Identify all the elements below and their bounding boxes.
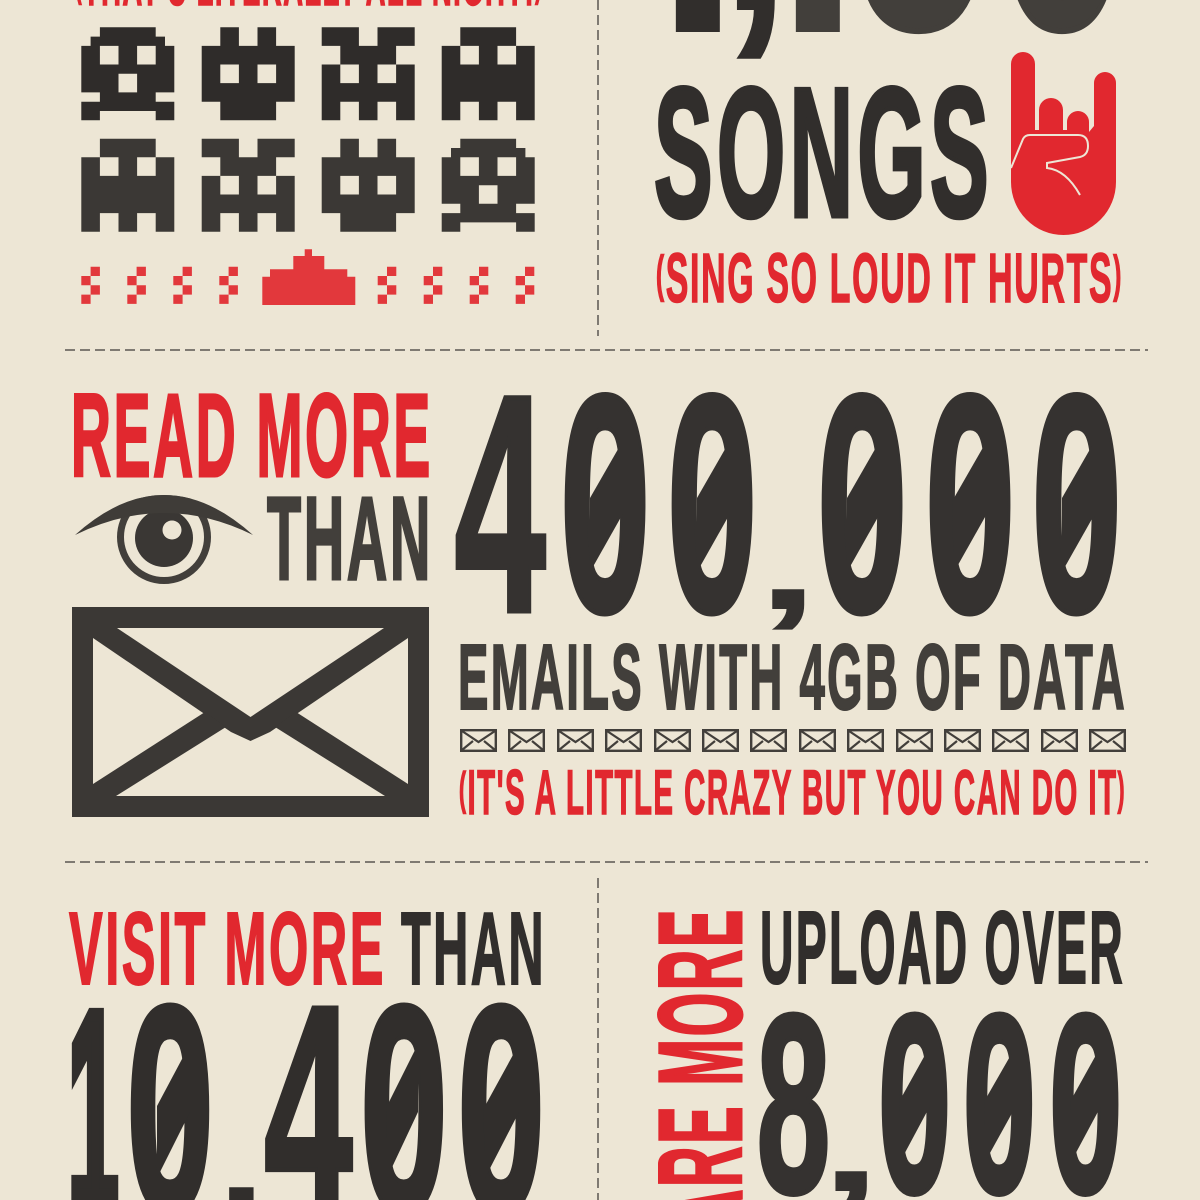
- big number 400,000: ,: [757, 489, 819, 638]
- caption: sing so loud it hurts: (: [656, 246, 666, 302]
- big number 400,000: 400: [454, 330, 758, 677]
- red shots: [81, 267, 534, 304]
- panel: emails: THAN: [267, 473, 433, 605]
- zero slashes: [590, 437, 1097, 572]
- icon: eye: [75, 485, 253, 580]
- big number 400,000: 000: [817, 330, 1122, 677]
- vertical dashed divider top: [597, 0, 599, 336]
- big number 400,000: [454, 330, 1122, 677]
- invaders row two: [81, 139, 535, 232]
- horizontal dashed divider two: [65, 861, 1148, 863]
- panel: emails: [71, 330, 1127, 828]
- invaders row one: [81, 27, 535, 120]
- red cannon ship: [262, 249, 355, 305]
- caption: it's a little crazy: (: [459, 763, 467, 814]
- panel: songs: ): [1113, 246, 1123, 302]
- panel: songs: [654, 0, 1126, 317]
- panel: visit websites: VISIT MORE: [69, 891, 386, 1006]
- text: THAN: [401, 891, 546, 1006]
- big number 10,400 (cropped at bottom): [68, 945, 545, 1200]
- zero slashes: [157, 1044, 519, 1178]
- horizontal dashed divider one: [65, 349, 1148, 351]
- vertical dashed divider bottom: [597, 878, 599, 1200]
- panel: emails: ): [1118, 763, 1126, 814]
- row of small envelopes: [461, 730, 1125, 751]
- panel: space invaders game: [81, 27, 535, 305]
- icon: large envelope: [72, 607, 429, 817]
- big number 8,000 (cropped at bottom): [757, 962, 1123, 1200]
- panel: share photos: [635, 890, 1125, 1200]
- icon: rock-on hand: [1011, 52, 1116, 235]
- big number 1,150 (cropped at top): [670, 0, 1126, 100]
- panel: emails: READ MORE: [71, 370, 433, 502]
- zero slashes: [900, 1046, 1101, 1162]
- panel: visit websites: [68, 891, 546, 1200]
